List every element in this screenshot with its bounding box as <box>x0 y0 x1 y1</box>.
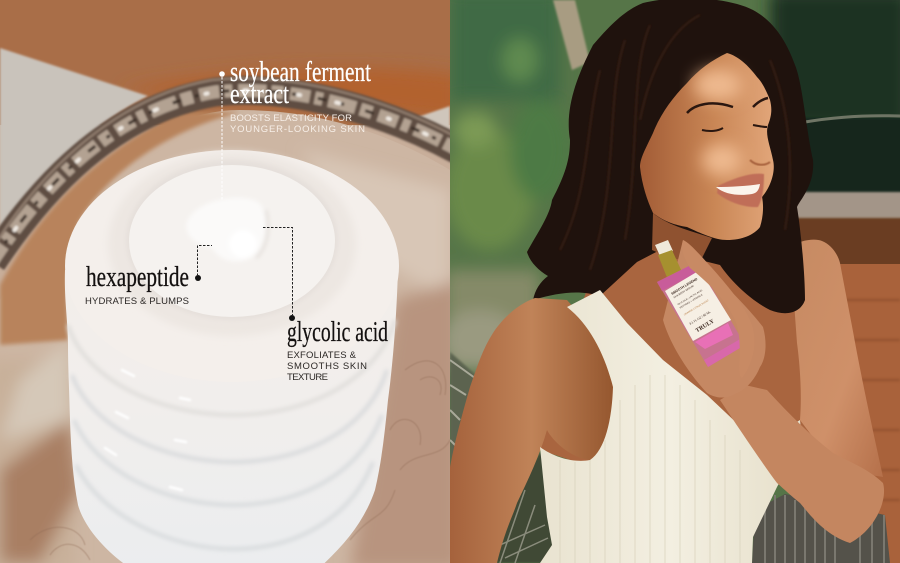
callout: soybean ferment extract: soybean ferment <box>230 57 371 88</box>
serum bottle: TRULY <box>695 318 716 334</box>
callout: glycolic acid: EXFOLIATES & <box>287 350 357 361</box>
callout: soybean ferment extract: extract <box>230 79 289 110</box>
callout: hexapeptide <box>85 246 212 307</box>
left shoulder and arm <box>450 298 613 563</box>
callout: glycolic acid <box>263 228 388 383</box>
hot tub and deck <box>795 116 900 563</box>
far cloth corner <box>419 105 450 130</box>
panel: woman holding serum bottle <box>440 0 900 563</box>
callout: glycolic acid: SMOOTHS SKIN <box>287 361 367 372</box>
white cloth <box>0 48 148 232</box>
chest and neck <box>541 252 811 461</box>
closed eyes and brows <box>687 98 768 113</box>
ornate tray rim <box>0 78 458 262</box>
face <box>640 53 774 262</box>
jar body with stacked rings <box>65 150 399 563</box>
ribbed white tank top <box>540 290 802 563</box>
silver tray surface <box>0 110 460 563</box>
cream dollop <box>187 198 268 262</box>
forearm <box>720 385 884 543</box>
serum bottle: AHA BODY SERUM <box>673 284 695 299</box>
serum bottle: 3.1 FL OZ / 90 ML <box>688 310 712 326</box>
fingers over bottle <box>682 240 745 348</box>
serum bottle: PEPTIDES + VITAMIN E <box>679 293 704 310</box>
face highlights <box>694 69 742 176</box>
serum bottle: ORANGE CITRUS SCENT <box>683 299 710 316</box>
panel: cream jar photo <box>0 0 460 563</box>
callout: soybean ferment extract: BOOSTS ELASTICITY FOR <box>230 113 352 124</box>
serum bottle: SMOOTH LEGEND <box>670 277 699 296</box>
callout: soybean ferment extract: YOUNGER-LOOKING SKIN <box>230 124 365 135</box>
callout: glycolic acid: TEXTURE <box>287 372 328 383</box>
callout: glycolic acid: glycolic acid <box>287 317 388 348</box>
smile <box>717 174 764 207</box>
callout: hexapeptide: HYDRATES & PLUMPS <box>85 296 189 307</box>
nose shadow <box>750 160 770 165</box>
tray filigree <box>30 361 450 560</box>
woven chair <box>450 352 890 563</box>
backdrop: warm brown wall <box>0 0 460 125</box>
callout: soybean ferment extract <box>219 57 371 200</box>
tree trunk <box>553 0 590 70</box>
serum bottle <box>655 240 745 367</box>
garden background <box>440 0 900 370</box>
right upper arm <box>790 240 883 477</box>
serum bottle: GLYCOLIC, LACTIC ACID, <box>677 289 704 306</box>
hair <box>527 0 813 313</box>
hand around bottle <box>663 240 766 398</box>
callout: hexapeptide: hexapeptide <box>86 262 189 293</box>
